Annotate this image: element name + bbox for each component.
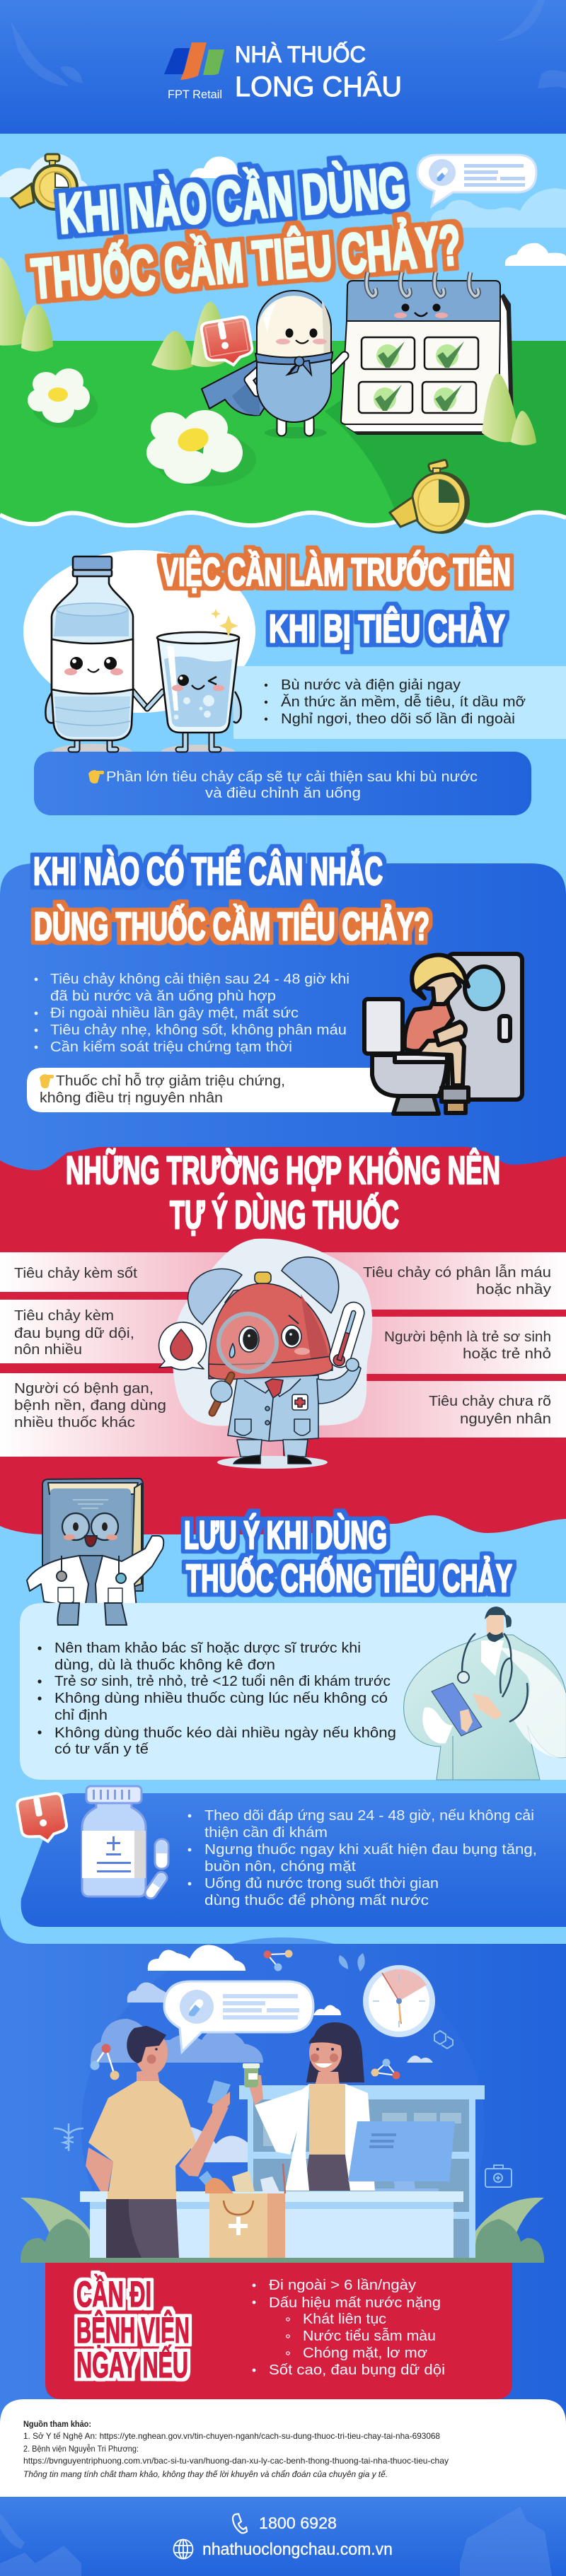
red warning box xyxy=(45,2263,512,2399)
right warning strips xyxy=(283,1252,566,1438)
hospital bullets: Dấu hiệu mất nước nặng xyxy=(269,2295,441,2311)
during-medication bullets: buồn nôn, chóng mặt xyxy=(204,1858,356,1875)
icon: medicine bottle xyxy=(82,1786,169,1901)
hero scene xyxy=(0,154,566,534)
consider bullets: đã bù nước và ăn uống phù hợp xyxy=(50,988,276,1004)
panel: pharmacy and hospital xyxy=(0,1916,566,2576)
left warning strips xyxy=(0,1252,283,1457)
illustration: doctor xyxy=(404,1607,566,1780)
icon: warning sticker xyxy=(16,1793,69,1846)
counter xyxy=(21,2143,544,2263)
left warning text: nhiều thuốc khác xyxy=(14,1414,135,1430)
hospital bullets xyxy=(253,2277,445,2378)
usage bullets: dùng, dù là thuốc không kê đơn xyxy=(54,1657,275,1673)
heading: warnings line 2: TỰ Ý DÙNG THUỐC xyxy=(170,1192,399,1237)
consider bullets: Cần kiểm soát triệu chứng tạm thời xyxy=(50,1039,292,1055)
right warning text: Tiêu chảy có phân lẫn máu xyxy=(363,1264,551,1281)
heading: go to hospital: NGAY NẾU xyxy=(76,2344,188,2385)
usage bullets: Trẻ sơ sinh, trẻ nhỏ, trẻ <12 tuổi nên đi khám trước xyxy=(54,1673,391,1689)
logo: wordmark: NHÀ THUỐC xyxy=(235,42,366,67)
customer man xyxy=(86,2026,231,2201)
pharmacy illustration xyxy=(21,1937,544,2319)
phone number: 1800 6928 xyxy=(259,2514,337,2532)
icon: pointing hand xyxy=(40,1074,54,1088)
during-medication bullets xyxy=(188,1807,537,1908)
footer xyxy=(0,2497,566,2576)
hospital bullets: Khát liên tục xyxy=(303,2311,386,2327)
toilet illustration xyxy=(364,954,522,1114)
clock xyxy=(363,1965,435,2037)
heading: go to hospital: CẦN ĐI xyxy=(76,2273,151,2314)
panel: references: Nguồn tham khảo: xyxy=(23,2419,91,2429)
during-medication bullets: dùng thuốc để phòng mất nước xyxy=(204,1892,429,1908)
computer monitor xyxy=(348,2121,455,2192)
right warning text: hoặc nhầy xyxy=(476,1281,552,1298)
consider bullets: Đi ngoài nhiều lần gây mệt, mất sức xyxy=(50,1005,299,1021)
grass field xyxy=(0,341,566,525)
icon: caduceus xyxy=(54,2123,83,2151)
shadows xyxy=(52,744,235,759)
heading: go to hospital xyxy=(76,2273,190,2385)
speech bubble: medication xyxy=(164,1981,313,2052)
first-step bullets xyxy=(265,677,526,727)
rounded note box: Phần lớn tiêu chảy cấp sẽ tự cải thiện sau khi bù nước xyxy=(106,769,478,785)
left warning text: Tiêu chảy kèm xyxy=(14,1307,114,1324)
icon: pointing hand xyxy=(88,770,104,783)
panel: references: 1. Sở Y tế Nghệ An: https://yte.nghean.gov.vn/tin-chuyen-nganh/cach-su-dung-thuoc-tri-tieu-chay-tai-nha-693068 xyxy=(23,2431,440,2441)
usage bullets: có tư vấn y tế xyxy=(54,1741,149,1757)
during-medication bullets: Uống đủ nước trong suốt thời gian xyxy=(204,1875,439,1892)
during-medication bullets: Ngưng thuốc ngay khi xuất hiện đau bụng tăng, xyxy=(204,1841,537,1858)
panel: references: https://bvnguyentriphuong.com.vn/bac-si-tu-van/huong-dan-xu-ly-cac-benh-thong-thuong-tai-nha-thuoc-tieu-chay xyxy=(23,2456,449,2466)
panel: first steps xyxy=(23,549,566,815)
consider bullets: Tiêu chảy nhẹ, không sốt, không phân máu xyxy=(50,1022,347,1038)
callout: symptom relief only: không điều trị nguyên nhân xyxy=(40,1090,223,1106)
heading: go to hospital: BỆNH VIỆN xyxy=(76,2309,190,2350)
logo: FPT Retail mark: FPT Retail xyxy=(168,88,222,101)
usage bullets xyxy=(37,1640,396,1757)
molecule woman side xyxy=(371,2059,400,2079)
molecule man side xyxy=(91,2044,119,2080)
medicine bag xyxy=(199,2164,285,2258)
pharmacist woman xyxy=(243,2022,375,2191)
glass character xyxy=(147,609,241,750)
during-medication bullets: thiện cần đi khám xyxy=(204,1824,328,1841)
book doctor character xyxy=(27,1479,163,1625)
callout: symptom relief only: Thuốc chỉ hỗ trợ giảm triệu chứng, xyxy=(56,1073,285,1089)
usage bullets: Không dùng nhiều thuốc cùng lúc nếu không có xyxy=(54,1690,388,1706)
icon: stopwatch bottom xyxy=(390,460,470,534)
pale cloud behind arm xyxy=(191,2127,248,2162)
right warning text: Người bệnh là trẻ sơ sinh xyxy=(384,1329,551,1345)
first-step bullets: Ăn thức ăn mềm, dễ tiêu, ít dầu mỡ xyxy=(281,694,526,710)
hills front right xyxy=(482,373,536,445)
callout: symptom relief only xyxy=(27,1068,396,1112)
usage bullets: chỉ định xyxy=(54,1707,108,1723)
website: nhathuoclongchau.com.vn xyxy=(202,2540,393,2559)
right warning text: hoặc trẻ nhỏ xyxy=(463,1346,551,1362)
left warning text: Tiêu chảy kèm sốt xyxy=(14,1265,137,1281)
clouds xyxy=(0,154,566,266)
usage bullets: Không dùng thuốc kéo dài nhiều ngày nếu không xyxy=(54,1725,396,1741)
first-step bullets: Bù nước và điện giải ngay xyxy=(281,677,461,693)
right warning text: nguyên nhân xyxy=(460,1411,551,1427)
panel: when to consider medicine xyxy=(0,849,566,1202)
right warning text xyxy=(363,1264,552,1427)
hospital bullets: Nước tiểu sẫm màu xyxy=(303,2328,436,2344)
icon: globe xyxy=(174,2539,192,2559)
left warning text xyxy=(14,1265,166,1430)
left warning text: Người có bệnh gan, xyxy=(14,1380,154,1397)
rounded note box: và điều chỉnh ăn uống xyxy=(205,785,361,801)
icon: medkit xyxy=(485,2165,512,2187)
hospital bullets: Sốt cao, đau bụng dữ dội xyxy=(269,2362,445,2378)
calendar xyxy=(341,272,514,435)
icon: phone xyxy=(233,2514,247,2533)
panel: references xyxy=(0,2399,566,2497)
logo: wordmark xyxy=(235,42,402,103)
light text band xyxy=(233,666,566,739)
usage bullets: Nên tham khảo bác sĩ hoặc dược sĩ trước khi xyxy=(54,1640,361,1656)
leaves xyxy=(21,2198,544,2258)
heading: usage notes line 1: LƯU Ý KHI DÙNG xyxy=(184,1513,387,1557)
speech bubble: pill xyxy=(417,155,536,206)
panel: references: 2. Bệnh viện Nguyễn Tri Phương: xyxy=(23,2443,139,2454)
panel: during medication xyxy=(16,1786,566,1927)
rounded note box xyxy=(34,752,531,815)
bottle character xyxy=(45,556,147,750)
header band xyxy=(0,0,566,134)
shelf xyxy=(239,2085,485,2258)
pill hero character xyxy=(202,291,345,438)
panel: usage notes list xyxy=(20,1603,566,1780)
white backdrop ellipse xyxy=(23,550,255,713)
icon: warning sticker xyxy=(200,316,255,369)
logo: wordmark: LONG CHÂU xyxy=(235,71,402,103)
icon: blood drop bubble xyxy=(159,1322,206,1370)
left warning text: đau bụng dữ dội, xyxy=(14,1325,134,1341)
flowers xyxy=(28,368,256,486)
logo: FPT Retail mark xyxy=(164,42,224,101)
bell doctor character xyxy=(159,1239,372,1469)
consider bullets xyxy=(35,971,350,1055)
illustration: book legs overlap xyxy=(57,1603,127,1625)
faint storefront xyxy=(0,2507,552,2576)
background clouds and icons xyxy=(54,1945,512,2187)
icon: stopwatch left xyxy=(11,154,77,209)
consider bullets: Tiêu chảy không cải thiện sau 24 - 48 giờ khi xyxy=(50,971,350,987)
hospital bullets: Đi ngoài > 6 lần/ngày xyxy=(269,2277,417,2293)
panel: cases not to self medicate xyxy=(0,1147,566,1534)
hospital bullets: Chóng mặt, lơ mơ xyxy=(303,2345,427,2361)
left warning text: bệnh nền, đang dùng xyxy=(14,1397,166,1414)
first-step bullets: Nghỉ ngơi, theo dõi số lần đi ngoài xyxy=(281,711,515,727)
hills xyxy=(0,257,228,371)
panel: references: Thông tin mang tính chất tham khảo, không thay thế lời khuyên và chẩn đoán của chuyên gia y tế. xyxy=(23,2469,388,2479)
right warning text: Tiêu chảy chưa rõ xyxy=(429,1393,551,1409)
left warning text: nôn nhiều xyxy=(14,1341,82,1358)
during-medication bullets: Theo dõi đáp ứng sau 24 - 48 giờ, nếu không cải xyxy=(204,1807,534,1824)
